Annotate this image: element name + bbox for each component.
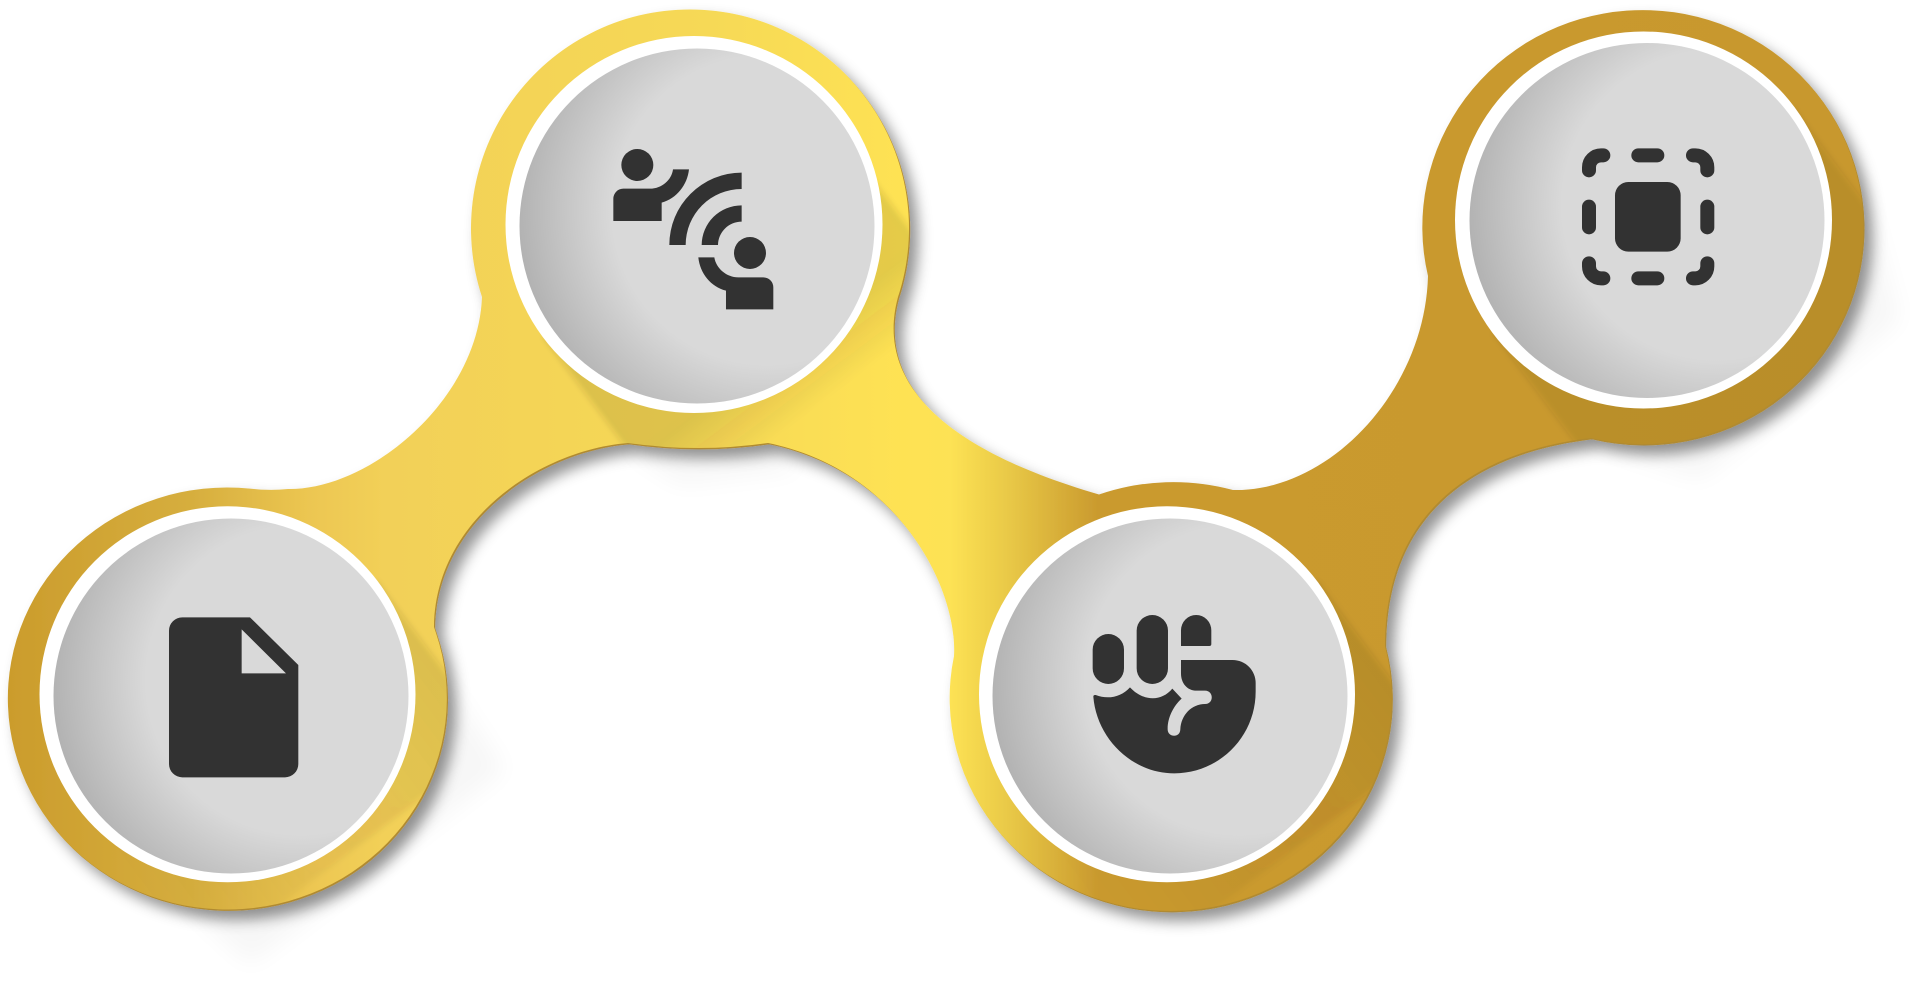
circle 1: document xyxy=(40,506,416,882)
circle 4: focus frame xyxy=(1455,32,1832,408)
long shadows cast on gold ribbon xyxy=(293,120,1864,882)
faint long shadows on background xyxy=(180,170,1900,965)
circle 3: raised fist xyxy=(979,506,1355,882)
icon: document xyxy=(169,617,298,777)
icon: fist xyxy=(1093,615,1256,773)
icon: two people with signal arcs xyxy=(613,149,773,309)
icon: dashed frame with square xyxy=(1589,155,1707,278)
circle 2: people communicating xyxy=(506,36,882,413)
